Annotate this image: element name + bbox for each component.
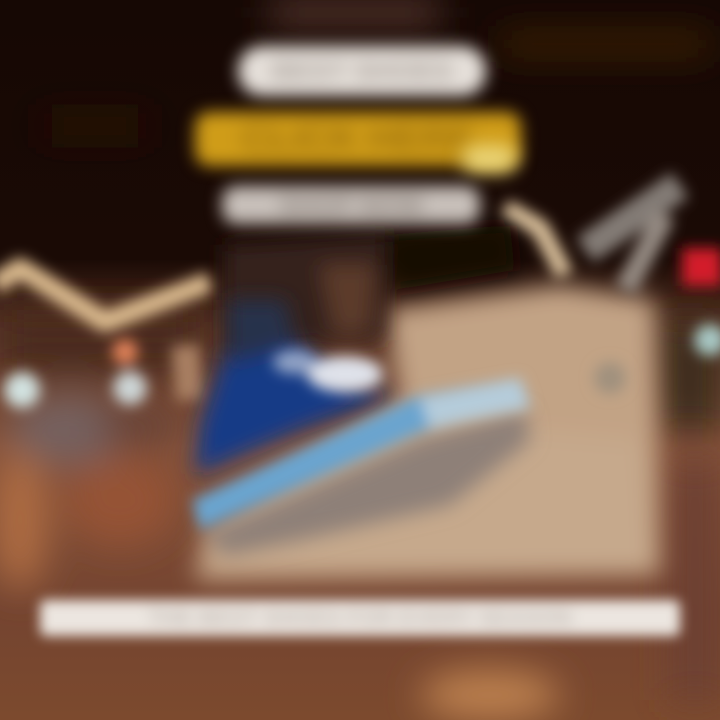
title line two highlight bbox=[462, 145, 517, 173]
title line three: white text band bbox=[222, 186, 480, 224]
panel: beige backdrop bbox=[195, 285, 660, 580]
shoe illustration bbox=[192, 225, 530, 555]
shoe grey underside bbox=[205, 410, 530, 555]
shoe white laces bbox=[273, 350, 383, 392]
shoe dark upper bbox=[225, 225, 515, 360]
shoe light blue sole bbox=[192, 378, 530, 530]
yellow heading text: CLICK HERE bbox=[242, 118, 474, 160]
shoe blue body bbox=[195, 300, 395, 475]
cream zigzag shapes bbox=[0, 185, 680, 400]
small accent shapes bbox=[4, 248, 720, 408]
bottom caption band bbox=[40, 600, 680, 636]
title line one: white band bbox=[238, 46, 486, 96]
title line two: yellow heading bbox=[195, 112, 521, 166]
title line three text: SHOP NOW bbox=[279, 190, 423, 220]
